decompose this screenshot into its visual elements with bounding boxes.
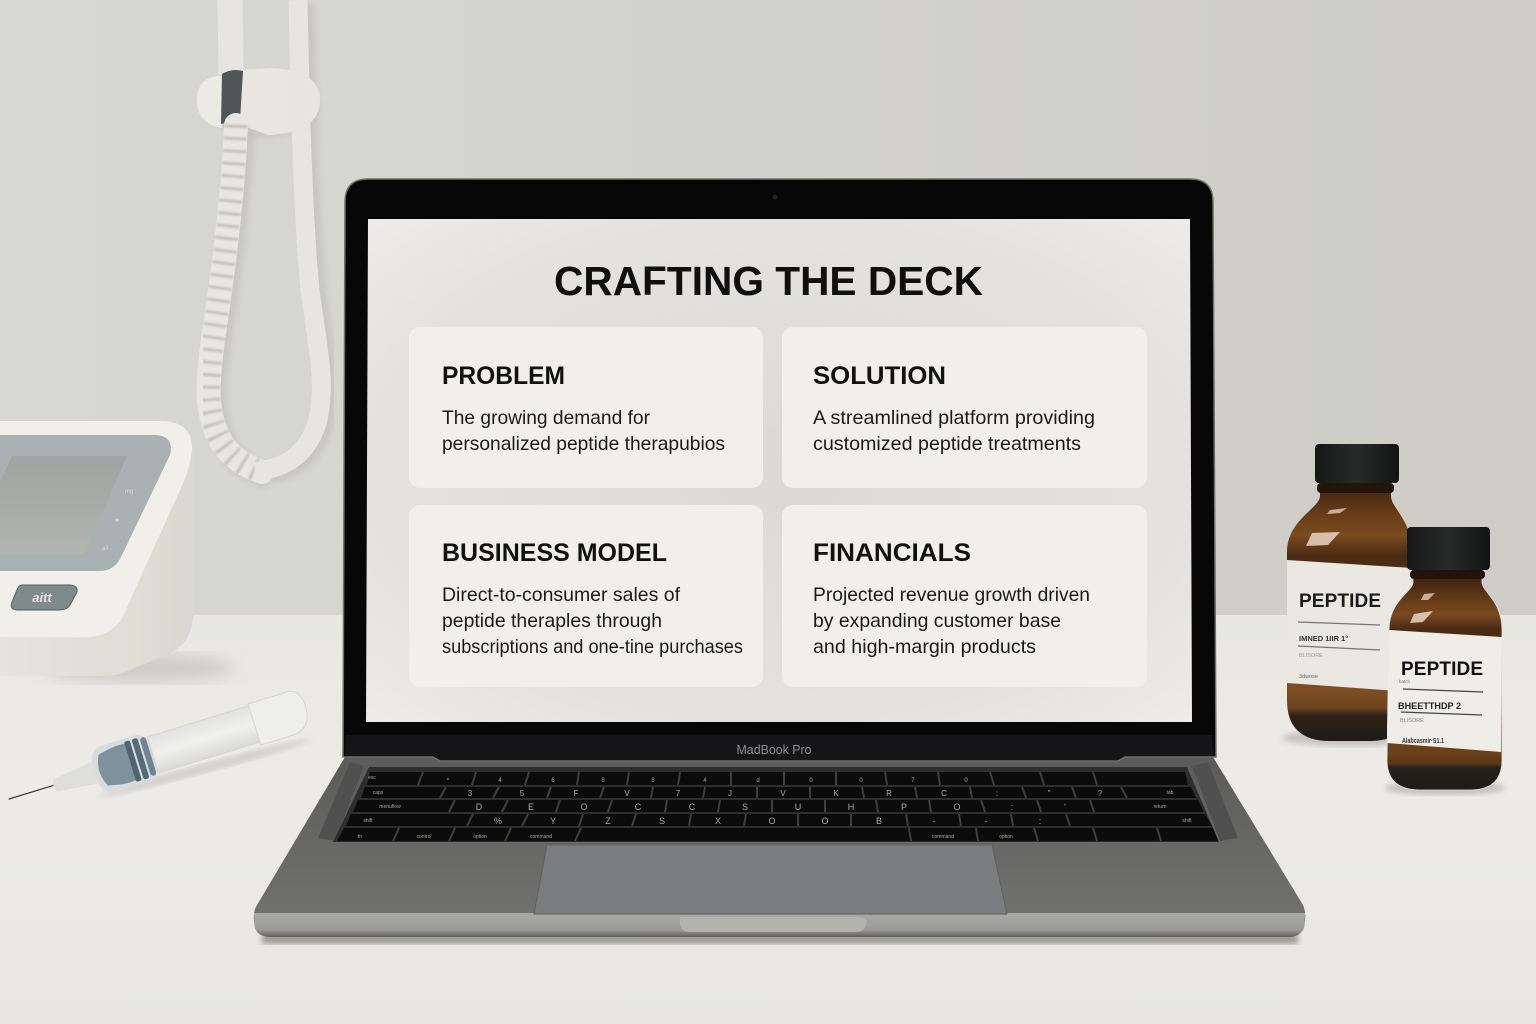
card: solution xyxy=(782,327,1147,488)
keyboard: option xyxy=(473,834,487,840)
keyboard: K xyxy=(833,789,839,798)
keyboard: E xyxy=(528,802,534,812)
card: financials: Projected revenue growth driven xyxy=(813,584,1090,606)
clamp left lobe xyxy=(197,76,222,128)
keyboard: D xyxy=(476,802,483,812)
small bottle label: batch xyxy=(1399,679,1411,684)
card: problem: PROBLEM xyxy=(442,362,565,390)
keyboard: : xyxy=(1039,816,1041,826)
keyboard: O xyxy=(580,802,588,812)
keyboard: d xyxy=(756,778,760,784)
base thumb notch xyxy=(680,917,866,932)
keyboard: 8 xyxy=(601,778,605,784)
keyboard: 5 xyxy=(520,789,525,798)
keyboard: shift xyxy=(363,818,373,824)
keyboard: : xyxy=(1011,802,1013,812)
trackpad xyxy=(534,845,1007,914)
monitor control panel xyxy=(0,435,171,571)
card: business model xyxy=(409,505,763,687)
keyboard: V xyxy=(780,789,786,798)
laptop xyxy=(254,179,1305,944)
keyboard: menuflow xyxy=(379,804,401,810)
keyboard: C xyxy=(689,802,696,812)
keyboard: R xyxy=(886,789,892,798)
keyboard: 0 xyxy=(859,778,863,784)
speaker grille right xyxy=(1192,762,1238,841)
icon: blood pressure monitor: ● xyxy=(115,517,119,524)
keyboard: 7 xyxy=(911,778,915,784)
keyboard: ' xyxy=(1064,802,1066,812)
small bottle label: BLISORE xyxy=(1400,718,1424,724)
keyboard: 6 xyxy=(551,778,555,784)
card: problem: personalized peptide therapubios xyxy=(442,433,725,455)
keyboard: fn xyxy=(358,834,362,840)
keyboard xyxy=(333,767,1219,842)
slide title: CRAFTING THE DECK xyxy=(554,258,983,304)
laptop lid and bezel xyxy=(343,179,1216,761)
monitor display xyxy=(0,456,127,554)
card: financials xyxy=(782,505,1147,687)
card: financials: by expanding customer base xyxy=(813,610,1061,632)
background: wall xyxy=(0,0,1536,616)
card: business model: subscriptions and one-tine purchases xyxy=(442,637,743,658)
brand label: MadBook Pro xyxy=(736,743,812,757)
monitor button xyxy=(11,585,77,610)
card: solution: SOLUTION xyxy=(813,362,946,390)
base front lip xyxy=(254,913,1305,937)
keyboard: O xyxy=(768,816,776,826)
clamp right lobe xyxy=(238,68,320,135)
card: business model: peptide theraples through xyxy=(442,610,662,632)
keyboard: command xyxy=(530,834,552,840)
ribbed coil xyxy=(209,125,262,472)
keyboard: O xyxy=(821,816,829,826)
card: problem: The growing demand for xyxy=(442,407,650,429)
keyboard: V xyxy=(624,789,630,798)
card: solution: customized peptide treatments xyxy=(813,433,1081,455)
keyboard: ^ xyxy=(447,778,450,784)
icon: large peptide bottle xyxy=(1282,444,1418,746)
keyboard: - xyxy=(932,816,936,826)
keyboard: Z xyxy=(605,816,611,826)
keyboard: X xyxy=(715,816,721,826)
smooth tube xyxy=(255,0,321,472)
keyboard: S xyxy=(659,816,665,826)
background: desk surface xyxy=(0,615,1536,1024)
keyboard: 3 xyxy=(468,789,473,798)
keyboard: P xyxy=(901,802,907,812)
keyboard: 4 xyxy=(498,778,502,784)
icon: syringe xyxy=(2,685,313,822)
keyboard: command xyxy=(932,834,954,840)
speaker grille left xyxy=(318,762,364,841)
large bottle label: PEPTIDE xyxy=(1299,591,1381,612)
laptop base xyxy=(254,757,1305,937)
large bottle label: 3dwose xyxy=(1299,674,1318,680)
keyboard: esc xyxy=(368,775,376,781)
card: financials: FINANCIALS xyxy=(813,539,971,567)
small bottle label: Alabcasmir·S1.1 xyxy=(1402,736,1444,745)
icon: wall-mounted hose and clamp xyxy=(197,0,327,477)
card: problem xyxy=(409,327,763,488)
card: solution: A streamlined platform providing xyxy=(813,407,1095,429)
laptop screen slide xyxy=(366,219,1192,722)
small bottle cap xyxy=(1407,527,1490,570)
large bottle label: BLISORE xyxy=(1299,653,1323,659)
small bottle label xyxy=(1387,630,1502,752)
keyboard: B xyxy=(876,816,882,826)
keyboard: Y xyxy=(550,816,556,826)
keyboard: - xyxy=(984,816,988,826)
keyboard: caps xyxy=(373,790,384,796)
keyboard: U xyxy=(795,802,801,812)
clamp dark band xyxy=(221,70,243,124)
keyboard: S xyxy=(742,802,748,812)
keyboard: ? xyxy=(1098,789,1103,798)
large bottle cap xyxy=(1315,444,1399,483)
keyboard: 7 xyxy=(676,789,681,798)
keyboard: control xyxy=(416,834,432,840)
small bottle label: PEPTIDE xyxy=(1401,659,1483,680)
card: business model: Direct-to-consumer sales of xyxy=(442,584,681,606)
large bottle label xyxy=(1287,560,1412,692)
icon: blood pressure monitor xyxy=(0,421,235,682)
keyboard: tab xyxy=(1167,790,1174,796)
large bottle label: IMNED 1IIR 1° xyxy=(1299,634,1348,643)
keyboard: shift xyxy=(1182,818,1192,824)
keyboard: 0 xyxy=(964,778,968,784)
keyboard: return xyxy=(1153,804,1167,810)
keyboard: 8 xyxy=(651,778,655,784)
icon: blood pressure monitor: mg xyxy=(125,489,133,495)
keyboard: C xyxy=(941,789,947,798)
keyboard: F xyxy=(574,789,579,798)
keyboard: 0 xyxy=(809,778,813,784)
icon: small peptide bottle xyxy=(1385,527,1505,795)
keyboard: C xyxy=(635,802,642,812)
camera xyxy=(772,194,778,200)
icon: blood pressure monitor: all xyxy=(102,546,108,552)
keyboard: option xyxy=(999,834,1013,840)
small bottle label: BHEETTHDP 2 xyxy=(1398,701,1461,712)
keyboard: : xyxy=(996,789,998,798)
card: business model: BUSINESS MODEL xyxy=(442,539,667,567)
keyboard: J xyxy=(728,789,732,798)
keyboard: % xyxy=(494,816,502,826)
keyboard: O xyxy=(953,802,961,812)
keyboard: " xyxy=(1048,789,1051,798)
monitor button: aitt xyxy=(32,590,52,605)
card: financials: and high-margin products xyxy=(813,636,1036,658)
keyboard: 4 xyxy=(703,778,707,784)
keyboard: H xyxy=(848,802,854,812)
